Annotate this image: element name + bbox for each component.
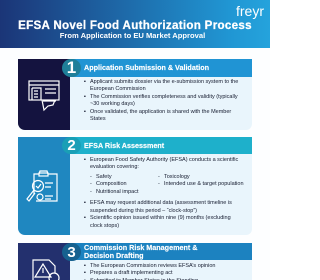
step 2 text: European Food Safety Authority (EFSA) conducts a scientific <box>90 157 238 163</box>
step 1 number: 1 <box>67 58 76 77</box>
step 1 header <box>70 59 252 77</box>
step 2 text: evaluation covering: <box>90 164 139 170</box>
header banner <box>0 0 270 48</box>
step 3 body <box>18 243 252 280</box>
step 2 text: ▪ <box>84 157 86 163</box>
step 2 text: Composition <box>96 181 127 187</box>
step 3 text: Prepares a draft implementing act <box>90 270 173 276</box>
step 1 text: Once validated, the application is shared with the Member <box>90 109 231 115</box>
title: EFSA Novel Food Authorization Process <box>18 18 252 32</box>
logo: freyr <box>236 3 264 19</box>
step 2 text: - <box>158 174 160 180</box>
step 3 heading: Decision Drafting <box>84 251 144 260</box>
step 3 header <box>70 243 252 260</box>
step 2 text: Intended use & target population <box>164 181 244 187</box>
step 2 number: 2 <box>67 137 76 154</box>
step 2 text: Toxicology <box>164 174 190 180</box>
step 1 text: ▪ <box>84 79 86 85</box>
step 2 heading: EFSA Risk Assessment <box>84 141 164 150</box>
step 2 icon panel <box>18 137 70 235</box>
step 1 text <box>84 79 238 122</box>
step 2 text: Nutritional impact <box>96 189 138 195</box>
step 1 heading: Application Submission & Validation <box>84 63 209 72</box>
step 2 text: ▪ <box>84 215 86 221</box>
step 1 text: European Commission <box>90 86 146 92</box>
step 2 text: Scientific opinion issued within nine (9) months (excluding <box>90 215 231 221</box>
step 2 number <box>62 137 81 154</box>
step 2 text: - <box>90 174 92 180</box>
step 2 text: EFSA may request additional data (assessment timeline is <box>90 200 232 206</box>
step 1 text: The Commission verifies completeness and validity (typically <box>90 94 238 100</box>
step 2 text: - <box>158 181 160 187</box>
step 3 number <box>62 243 81 261</box>
icon: document with warning <box>32 259 60 280</box>
icon: clipboard with magnifier <box>26 170 58 202</box>
step 2 text: Safety <box>96 174 112 180</box>
step 2 text: - <box>90 189 92 195</box>
step 3 text: ▪ <box>84 263 86 269</box>
step 2 text: clock stops) <box>90 223 119 229</box>
step 2 text: - <box>90 181 92 187</box>
step 3 number: 3 <box>67 244 76 261</box>
panel: step 1 <box>18 58 252 130</box>
step 1 text: ~30 working days) <box>90 101 135 107</box>
step 3 text: ▪ <box>84 270 86 276</box>
step 3 heading <box>84 243 198 260</box>
step 2 text <box>84 157 244 229</box>
step 3 heading: Commission Risk Management & <box>84 243 197 252</box>
step 1 icon panel <box>18 59 70 130</box>
step 3 text <box>84 263 216 280</box>
step 2 text: ▪ <box>84 200 86 206</box>
panel: step 2 <box>18 137 252 235</box>
step 1 text: Applicant submits dossier via the e-submission system to the <box>90 79 238 85</box>
step 2 header <box>70 137 252 154</box>
step 2 body <box>18 137 252 235</box>
step 1 body <box>18 59 252 130</box>
subtitle: From Application to EU Market Approval <box>60 31 205 40</box>
panel: step 3 <box>18 243 252 280</box>
icon: application form <box>28 80 60 112</box>
step 3 text: The European Commission reviews EFSA’s opinion <box>90 263 215 269</box>
step 2 text: suspended during this period – “clock-stop”) <box>90 208 197 214</box>
step 1 number <box>62 59 81 77</box>
step 1 text: States <box>90 116 106 122</box>
step 3 icon panel <box>18 243 70 280</box>
step 1 text: ▪ <box>84 109 86 115</box>
step 1 text: ▪ <box>84 94 86 100</box>
